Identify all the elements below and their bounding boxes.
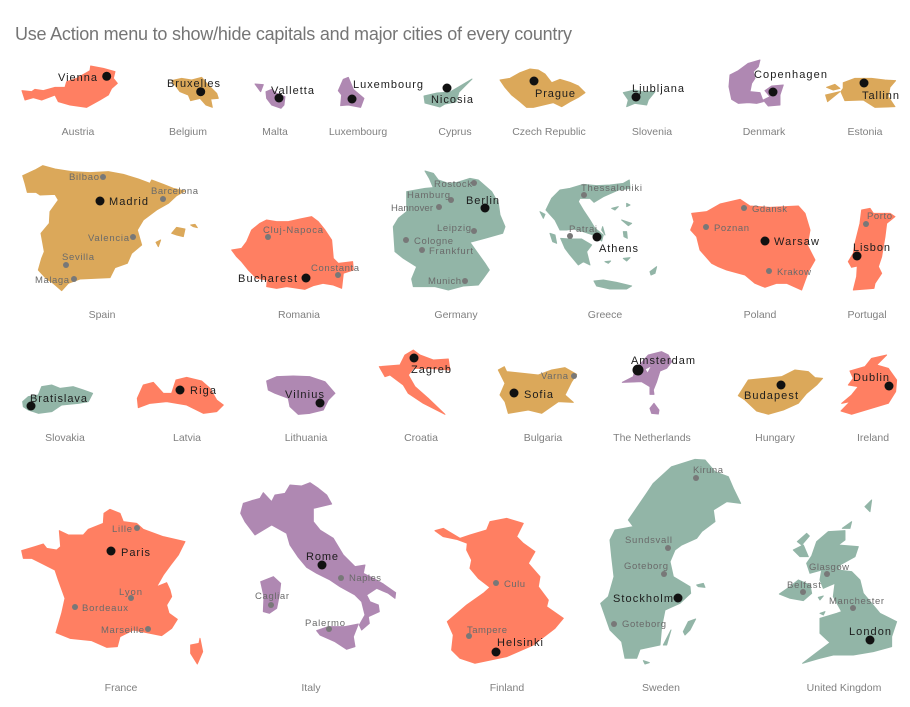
country: Portugal <box>847 208 895 321</box>
country: Portugal: Porto <box>867 211 892 222</box>
country: Germany: Germany <box>434 309 478 321</box>
country: Austria: Austria <box>62 126 94 138</box>
country: Ireland: Dublin <box>853 372 889 384</box>
country: Belgium: Belgium <box>169 126 207 138</box>
country: France: Bordeaux <box>82 603 128 614</box>
country: Denmark: Copenhagen <box>754 69 827 81</box>
country: Romania: Romania <box>278 309 320 321</box>
country: Ireland <box>841 355 897 444</box>
country: France: Lyon <box>119 587 142 598</box>
country: Latvia: Riga <box>190 385 217 397</box>
country: Croatia: Zagreb <box>411 364 451 376</box>
country: Greece: Thessaloniki <box>581 183 642 194</box>
country: Portugal: Lisbon <box>853 242 890 254</box>
country: Poland: Poznan <box>714 223 749 234</box>
country: Portugal: Portugal <box>847 309 887 321</box>
country: Spain: Spain <box>89 309 116 321</box>
country: Germany: Berlin <box>466 195 499 207</box>
country: Sweden: Stockholm <box>613 593 673 605</box>
country: Sweden: Kiruna <box>693 465 724 476</box>
country: Bulgaria <box>498 367 577 444</box>
country: Spain: Barcelona <box>151 186 199 197</box>
country: Cyprus <box>424 79 474 138</box>
country: France: Paris <box>121 547 150 559</box>
country: Malta: Malta <box>262 126 288 138</box>
country: Sweden <box>601 459 741 694</box>
country: Estonia: Estonia <box>847 126 883 138</box>
country: Spain: Madrid <box>109 196 148 208</box>
country: Finland: Tampere <box>467 625 507 636</box>
country: Romania <box>232 217 360 321</box>
country: Italy <box>241 483 396 694</box>
country: Greece: Greece <box>588 309 622 321</box>
country: Austria <box>22 66 117 138</box>
country: Germany: Cologne <box>414 236 453 247</box>
country: Luxembourg: Luxembourg <box>353 79 423 91</box>
country: Belgium: Bruxelles <box>167 78 220 90</box>
country: Finland: Helsinki <box>497 637 543 649</box>
country: Denmark <box>729 60 827 138</box>
country: United Kingdom <box>779 500 897 694</box>
country: Czech Republic <box>500 69 586 138</box>
country: Luxembourg: Luxembourg <box>329 126 387 138</box>
country: Finland: Culu <box>504 579 525 590</box>
country: Greece: Athens <box>599 243 638 255</box>
country: Germany: Hannover <box>391 203 433 214</box>
country: Slovakia: Bratislava <box>30 393 88 405</box>
country: Greece: Patrai <box>569 224 597 235</box>
country: Croatia <box>379 350 451 444</box>
country: Spain: Malaga <box>35 275 70 286</box>
country: Bulgaria: Sofia <box>524 389 554 401</box>
country: Italy: Rome <box>306 551 338 563</box>
country: The Netherlands: Amsterdam <box>631 355 695 367</box>
country: Lithuania: Vilnius <box>285 389 324 401</box>
country: Sweden: Sweden <box>642 682 680 694</box>
country: The Netherlands: The Netherlands <box>613 432 691 444</box>
country: Finland <box>435 518 563 694</box>
country: Italy: Naples <box>349 573 381 584</box>
country: Malta: Valletta <box>271 85 315 97</box>
country: Luxembourg <box>329 77 423 138</box>
country: Romania: Constanta <box>311 263 360 274</box>
country: Spain: Bilbao <box>69 172 99 183</box>
country: Slovakia <box>23 385 93 444</box>
country: Lithuania: Lithuania <box>285 432 327 444</box>
country: Slovakia: Slovakia <box>45 432 85 444</box>
country: United Kingdom: Manchester <box>829 596 884 607</box>
country: Italy: Italy <box>301 682 321 694</box>
country: Greece <box>540 180 657 321</box>
country: Malta <box>255 84 315 138</box>
country: Czech Republic: Prague <box>535 88 575 100</box>
country: Romania: Bucharest <box>238 273 297 285</box>
title: Use Action menu to show/hide capitals and major cities of every country <box>15 24 572 44</box>
country: Finland: Finland <box>490 682 524 694</box>
country: Denmark: Denmark <box>743 126 786 138</box>
country: Spain: Valencia <box>88 233 130 244</box>
country: Germany: Leipzig <box>437 223 471 234</box>
country: United Kingdom: United Kingdom <box>807 682 882 694</box>
country: France: Marseille <box>101 625 144 636</box>
country: France <box>22 509 203 694</box>
country: Latvia <box>137 377 223 444</box>
country: Hungary: Budapest <box>744 390 798 402</box>
country: Poland: Krakow <box>777 267 811 278</box>
country: Hungary: Hungary <box>755 432 796 444</box>
country: Ireland: Ireland <box>857 432 889 444</box>
country: Croatia: Croatia <box>404 432 438 444</box>
country: Slovenia: Slovenia <box>632 126 672 138</box>
country: Germany <box>391 171 505 321</box>
country: Sweden: Goteborg <box>622 619 666 630</box>
country: Austria: Vienna <box>58 72 98 84</box>
country: Spain: Sevilla <box>62 252 95 263</box>
country: Germany: Rostock <box>434 179 472 190</box>
country: Hungary <box>738 370 823 444</box>
country: Cyprus: Cyprus <box>438 126 472 138</box>
country: Slovenia: Ljubljana <box>632 83 685 95</box>
country: Italy: Palermo <box>305 618 345 629</box>
country: France: France <box>105 682 137 694</box>
country: Bulgaria: Bulgaria <box>524 432 562 444</box>
country: The Netherlands <box>613 352 695 444</box>
country: Spain <box>23 166 199 321</box>
country: Poland: Warsaw <box>774 236 819 248</box>
country: Romania: Cluj-Napoca <box>263 225 324 236</box>
country: Sweden: Goteborg <box>624 561 668 572</box>
country: Lithuania <box>267 376 335 444</box>
country: Latvia: Latvia <box>173 432 201 444</box>
country: Estonia: Tallinn <box>862 90 899 102</box>
country: Italy: Cagliar <box>255 591 289 602</box>
country: Czech Republic: Czech Republic <box>512 126 586 138</box>
country: Slovenia <box>623 83 685 138</box>
country: France: Lille <box>112 524 132 535</box>
country: Germany: Frankfurt <box>429 246 473 257</box>
country: Poland: Gdansk <box>752 204 787 215</box>
country: United Kingdom: London <box>849 626 891 638</box>
country: Estonia <box>826 78 899 138</box>
country: United Kingdom: Glasgow <box>809 562 849 573</box>
country: United Kingdom: Belfast <box>787 580 821 591</box>
country: Germany: Munich <box>428 276 461 287</box>
country: Cyprus: Nicosia <box>431 94 474 106</box>
country: Bulgaria: Varna <box>541 371 569 382</box>
country: Sweden: Sundsvall <box>625 535 672 546</box>
country: Belgium <box>167 77 220 138</box>
country: Poland: Poland <box>744 309 777 321</box>
country: Poland <box>691 199 819 321</box>
country: Germany: Hamburg <box>407 190 450 201</box>
